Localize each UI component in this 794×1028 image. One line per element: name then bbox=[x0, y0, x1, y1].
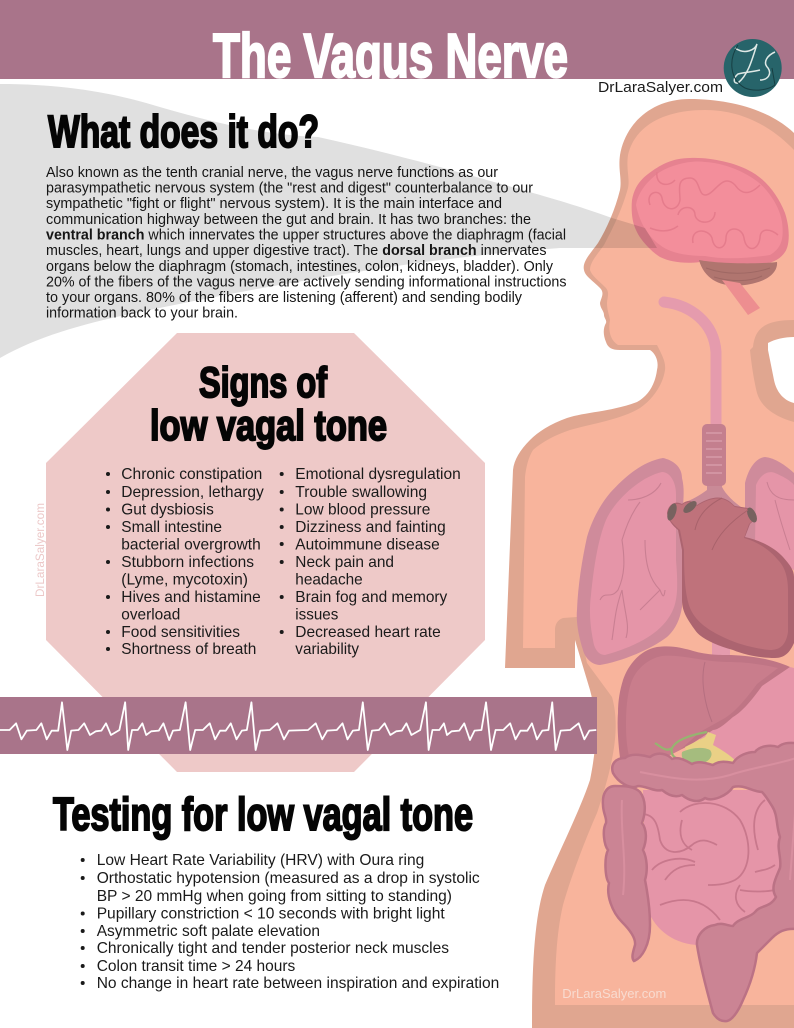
signs list left column: Food sensitivities bbox=[121, 624, 240, 641]
testing list: Low Heart Rate Variability (HRV) with Oura ring bbox=[97, 852, 424, 869]
signs list left column: Small intestine bbox=[121, 519, 222, 536]
signs list left column: (Lyme, mycotoxin) bbox=[121, 572, 248, 588]
heading: signs of: Signs of bbox=[199, 359, 328, 407]
intro paragraph bbox=[46, 165, 566, 322]
intro paragraph: 20% of the fibers of the vagus nerve are actively sending informational instructions bbox=[46, 274, 566, 290]
signs list right column: Neck pain and bbox=[295, 554, 394, 571]
logo bbox=[724, 39, 782, 97]
ecg trace bbox=[0, 702, 596, 750]
right lung bbox=[745, 457, 794, 570]
gallbladder bbox=[655, 732, 712, 764]
ascending colon bbox=[603, 786, 650, 961]
heart bbox=[665, 497, 794, 658]
signs list right column: issues bbox=[295, 606, 338, 624]
signs list left column: Shortness of breath bbox=[121, 641, 256, 658]
large intestine bbox=[612, 743, 794, 1021]
intro paragraph: communication highway between the gut and brain. It has two branches: the bbox=[46, 212, 531, 228]
intro paragraph: sympathetic "fight or flight" nervous system). It is the main interface and bbox=[46, 196, 502, 212]
signs list right column: Dizziness and fainting bbox=[295, 519, 446, 536]
signs list left column: bacterial overgrowth bbox=[121, 536, 261, 553]
octagon panel: signs of low vagal tone bbox=[46, 333, 485, 772]
octagon background bbox=[46, 333, 485, 772]
signs list right column: Autoimmune disease bbox=[295, 536, 440, 553]
left lung bbox=[577, 458, 684, 665]
testing list: Pupillary constriction < 10 seconds with bright light bbox=[97, 906, 445, 922]
stomach bbox=[700, 667, 794, 765]
signs list right column: Low blood pressure bbox=[295, 502, 431, 518]
cerebellum bbox=[699, 260, 777, 286]
signs list left column bbox=[106, 466, 264, 658]
esophagus bbox=[664, 302, 716, 430]
liver bbox=[618, 646, 790, 775]
skin fill bbox=[523, 110, 794, 1005]
signs list right column: variability bbox=[295, 641, 359, 658]
signs list left column: Stubborn infections bbox=[121, 554, 254, 571]
ecg band bbox=[0, 697, 597, 754]
intro paragraph: organs below the diaphragm (stomach, intestines, colon, kidneys, bladder). Only bbox=[46, 259, 554, 275]
signs list right column: Trouble swallowing bbox=[295, 484, 427, 501]
signs list left column: Hives and histamine bbox=[121, 589, 261, 606]
bottom watermark: DrLaraSalyer.com bbox=[562, 986, 666, 1001]
intro paragraph: information back to your brain. bbox=[46, 306, 238, 322]
signs list right column: Decreased heart rate bbox=[295, 624, 441, 641]
signs list right column: Brain fog and memory bbox=[295, 589, 447, 606]
intro paragraph: Also known as the tenth cranial nerve, the vagus nerve functions as our bbox=[46, 165, 498, 181]
lower esophagus bbox=[712, 640, 730, 662]
signs list right column: headache bbox=[295, 572, 363, 588]
trachea bbox=[685, 424, 745, 520]
signs list left column: Gut dysbiosis bbox=[121, 502, 214, 518]
testing list: Colon transit time > 24 hours bbox=[97, 958, 295, 975]
signs list right column bbox=[280, 466, 461, 658]
pancreas bbox=[685, 732, 737, 765]
title: The Vagus Nerve bbox=[213, 22, 568, 91]
signs list left column: Depression, lethargy bbox=[121, 484, 264, 501]
body illustration bbox=[505, 99, 794, 1028]
testing list: No change in heart rate between inspiration and expiration bbox=[97, 975, 499, 992]
testing list: Orthostatic hypotension (measured as a drop in systolic bbox=[97, 870, 480, 887]
heading: testing: Testing for low vagal tone bbox=[53, 788, 473, 840]
brain bbox=[632, 158, 789, 264]
heading: what does it do: What does it do? bbox=[48, 106, 319, 157]
testing list: BP > 20 mmHg when going from sitting to standing) bbox=[97, 888, 452, 905]
intro paragraph: parasympathetic nervous system (the "rest and digest" counterbalance to our bbox=[46, 181, 533, 197]
signs list left column: overload bbox=[121, 606, 180, 624]
signs list left column: Chronic constipation bbox=[121, 466, 262, 483]
website label: DrLaraSalyer.com bbox=[598, 79, 723, 96]
signs list right column: Emotional dysregulation bbox=[295, 466, 461, 483]
testing list: Asymmetric soft palate elevation bbox=[97, 923, 320, 940]
heading: low vagal tone: low vagal tone bbox=[150, 402, 387, 450]
gray background swoosh bbox=[0, 84, 657, 358]
header band bbox=[0, 0, 794, 79]
testing list: Chronically tight and tender posterior neck muscles bbox=[97, 940, 449, 957]
body silhouette outline bbox=[505, 99, 794, 1028]
brainstem bbox=[722, 280, 760, 315]
intro paragraph: muscles, heart, lungs and upper digestive tract). The dorsal branch innervates bbox=[46, 243, 546, 259]
testing list bbox=[81, 852, 499, 992]
intro paragraph: to your organs. 80% of the fibers are listening (afferent) and sending bodily bbox=[46, 290, 523, 306]
vertical watermark: DrLaraSalyer.com bbox=[35, 503, 47, 597]
small intestine bbox=[643, 790, 790, 945]
intro paragraph: ventral branch which innervates the upper structures above the diaphragm (facial bbox=[46, 228, 566, 244]
